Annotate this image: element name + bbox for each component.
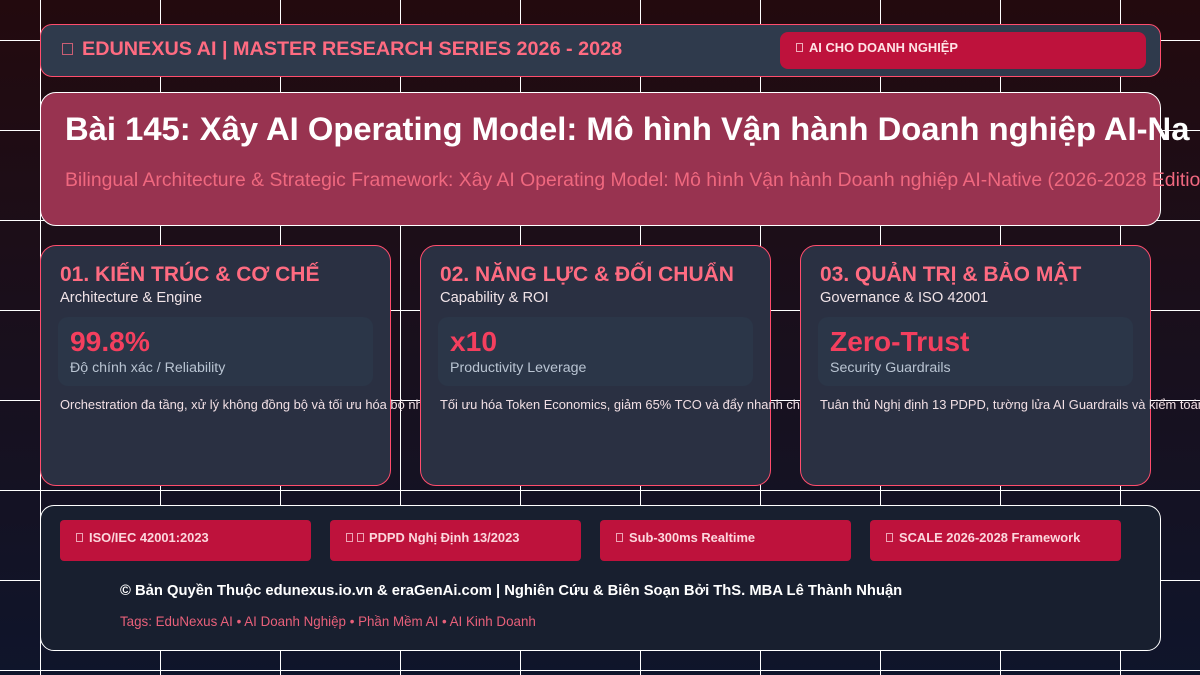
stat: productivity bbox=[438, 317, 753, 386]
card heading: 03. QUẢN TRỊ & BẢO MẬT bbox=[820, 263, 1081, 286]
stat: security: Security Guardrails bbox=[830, 360, 951, 376]
footer panel bbox=[40, 505, 1161, 651]
stat: reliability bbox=[58, 317, 373, 386]
card description: Orchestration đa tầng, xử lý không đồng bộ và tối ưu hóa bộ nhớ ngữ cảnh cho doanh nghiệp. bbox=[60, 397, 599, 412]
chip: realtime bbox=[600, 520, 851, 561]
stat: reliability: 99.8% bbox=[70, 325, 150, 357]
icon: header glyph bbox=[62, 43, 73, 55]
copyright line: © Bản Quyền Thuộc edunexus.io.vn & eraGenAi.com | Nghiên Cứu & Biên Soạn Bởi ThS. MBA Lê Thành Nhuận bbox=[120, 583, 902, 599]
panel: capability and ROI bbox=[420, 245, 771, 486]
tags line: Tags: EduNexus AI • AI Doanh Nghiệp • Phần Mềm AI • AI Kinh Doanh bbox=[120, 614, 536, 629]
chip: framework bbox=[870, 520, 1121, 561]
badge label: AI CHO DOANH NGHIỆP bbox=[809, 40, 958, 55]
card heading: 01. KIẾN TRÚC & CƠ CHẾ bbox=[60, 263, 319, 286]
subtitle: Bilingual Architecture & Strategic Framework: Xây AI Operating Model: Mô hình Vận hành Doanh nghiệp AI-Native (2026-2028 Edition) bbox=[65, 169, 1200, 191]
card subheading: Capability & ROI bbox=[440, 290, 549, 306]
panel: architecture and engine bbox=[40, 245, 391, 486]
chip: framework: SCALE 2026-2028 Framework bbox=[899, 530, 1080, 545]
card description: Tối ưu hóa Token Economics, giảm 65% TCO và đẩy nhanh chu kỳ triển khai sản phẩm AI. bbox=[440, 397, 958, 412]
chip: PDPD: PDPD Nghị Định 13/2023 bbox=[369, 530, 519, 545]
stat: productivity: Productivity Leverage bbox=[450, 360, 586, 376]
stat: reliability: Độ chính xác / Reliability bbox=[70, 360, 225, 376]
card subheading: Architecture & Engine bbox=[60, 290, 202, 306]
chip: ISO bbox=[60, 520, 311, 561]
card subheading: Governance & ISO 42001 bbox=[820, 290, 988, 306]
panel: governance and ISO bbox=[800, 245, 1151, 486]
header bar bbox=[40, 24, 1161, 77]
category badge bbox=[780, 32, 1146, 69]
hero panel bbox=[40, 92, 1161, 226]
stat: security: Zero-Trust bbox=[830, 325, 969, 357]
stat: productivity: x10 bbox=[450, 325, 497, 357]
main title: Bài 145: Xây AI Operating Model: Mô hình Vận hành Doanh nghiệp AI-Na bbox=[65, 110, 1189, 147]
chip: ISO: ISO/IEC 42001:2023 bbox=[89, 530, 209, 545]
icon: badge glyph bbox=[796, 43, 803, 52]
chip: realtime: Sub-300ms Realtime bbox=[629, 530, 755, 545]
chip: PDPD bbox=[330, 520, 581, 561]
stat: security bbox=[818, 317, 1133, 386]
header title: EDUNEXUS AI | MASTER RESEARCH SERIES 2026 - 2028 bbox=[82, 38, 622, 60]
card heading: 02. NĂNG LỰC & ĐỐI CHUẨN bbox=[440, 263, 734, 286]
